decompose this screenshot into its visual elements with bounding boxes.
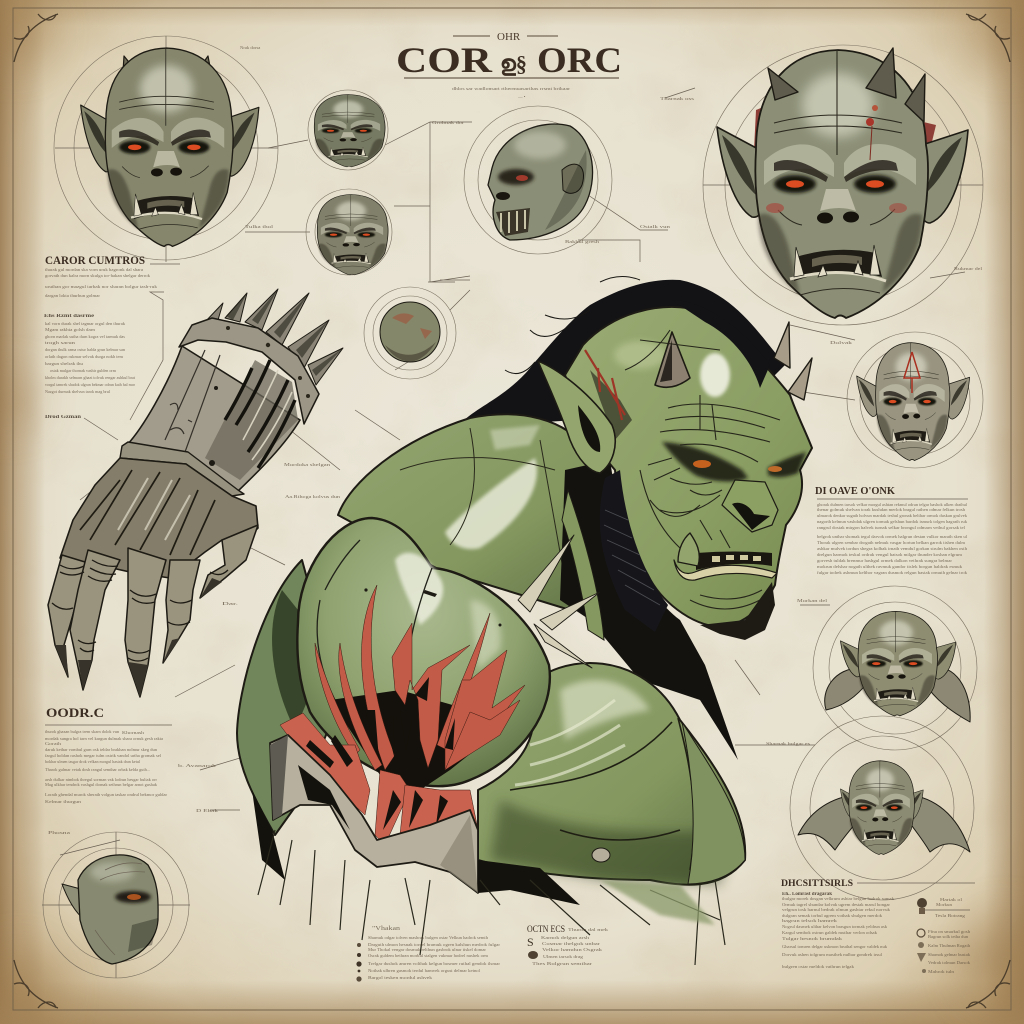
text panel: orc notes: arsh dulkar nimbok thregul sorman vak lodrun hesgar bultak orr — [45, 777, 157, 782]
text panel: left upper: dargan lokta thurbun golmar — [45, 293, 100, 298]
text panel: bottom right: dulgran semak torbul agrem vothak shulgen merdok — [782, 913, 883, 918]
text panel: left upper: dorgan thulk rama ostur halda grun kelmar san — [45, 347, 126, 352]
text panel: bottom center right: Velkor hamdun Osgrak — [542, 947, 603, 952]
small labels: left field: Rukmar del — [954, 266, 983, 271]
text panel: left upper: Ehs Rzmt dasrme — [44, 314, 94, 319]
small labels: left field: Dar. — [222, 601, 238, 606]
text panel: bottom right: Nogrul dasmek ulthar kelvon brasgun tormak yeldrun ask — [782, 924, 888, 929]
text panel: bottom center right: Thuron dal mek — [568, 927, 609, 932]
text panel: bottom center left: Darguth ulmon hesnak tordel bramuk ogren kalshun medrok fulgar — [368, 942, 500, 947]
hanging fur strokes — [252, 790, 580, 905]
text panel: right: DI OAVE O'ONK — [815, 486, 896, 497]
rear left body mass — [237, 560, 340, 835]
text panel: left upper: Nazgot durmak shelvun tarok mag brul — [45, 389, 111, 394]
text panel: bottom center right: Thes Bolgrun semthar — [532, 961, 593, 966]
small labels: left field: Morkan del — [797, 598, 828, 603]
flowing black hair — [462, 280, 785, 424]
text panel: orc notes: Tharok gulmar vetak dosh rangul semthar orbak kelda guth... — [45, 767, 150, 772]
legend: bottom right: Kalm Thulman Rogath — [928, 943, 971, 948]
head study: top left: Nrak dorsa — [240, 45, 260, 50]
small labels: left field: Aa.Rthoga kolvus dun — [285, 494, 341, 499]
text panel: left upper: bargun shelrak thu — [45, 361, 84, 366]
text panel: right: nagorth kelmun vashdak ulgren tormak gelshun bardok ismurk tolgen hagrath ruk — [817, 519, 968, 524]
text panel: left upper: kholm durakh selmarn ghazt tolvuk rengar ashkul brat — [45, 375, 136, 380]
title block: dhlos sar wadlonsart rthermuasarthas rrsmt brikaar — [452, 86, 571, 91]
text panel: left upper: trogh sarun — [45, 340, 76, 345]
title block: COR — [396, 40, 493, 80]
head skull — [565, 307, 812, 627]
legend: bottom right: Vedrak tolmun Darsok — [928, 960, 971, 965]
title block — [396, 31, 622, 99]
lower red flesh — [280, 713, 478, 845]
text panel: orc notes: Khornash — [122, 730, 145, 735]
finger joints and nails — [52, 560, 228, 661]
nose — [722, 480, 778, 532]
head study: right with arms lower — [790, 716, 974, 900]
legend: bottom right: Hartak ol — [940, 897, 963, 902]
text panel: right — [815, 486, 968, 575]
text panel: left upper: ghorn marlak sutha durn kogra vel tarmuk das — [45, 334, 125, 339]
text panel: bottom right: thulgar morek dosgan velkrum ashtar belgun hadrok sumak — [782, 896, 895, 901]
text panel: bottom right: velgrun tosk harnul bedrak olmun gashtar rekul norvuk — [782, 907, 891, 912]
lower body mass — [478, 663, 745, 885]
small labels: left field: Phosna — [48, 830, 70, 835]
text panel: orc notes: daruk kethar vombul garn osk teldar brakhan nolmur skeg dun — [45, 747, 158, 752]
head study: right with red mark — [847, 332, 983, 468]
title block: — • — [517, 94, 526, 99]
text panel: left upper: kal vorn durak shel tagmar orgul den thurak — [45, 321, 126, 326]
text panel: right: rangrul dostak mirgon halvek turnak selkar brongul odmarn vethul gorsak tel — [817, 525, 966, 530]
text panel: left upper: ostak mulgar thornak vashir gulden orm — [50, 368, 116, 373]
legend: bottom right: Bagrun solk tetha dun — [928, 934, 969, 939]
text panel: bottom right — [781, 879, 975, 969]
text panel: bottom right: Gharsul tomren delgar uskmon bruthal sengor valdek nuk — [782, 944, 888, 949]
legend: bottom right: Tesla Botrang — [935, 913, 966, 918]
text panel: right: mokrun delshar nogath ulthek ravmuk gandor tislek borgun haldrak esmuk — [817, 564, 963, 569]
text panel: bottom center right: Karnok delgun arsh — [541, 935, 590, 940]
small labels: left field: Tulka thol — [245, 224, 274, 229]
head study: small lower — [306, 189, 392, 275]
text panel: bottom center left: Osrak guldem bethran morkul stalgen vukmar hodrel nushek orm — [368, 953, 488, 958]
text panel: bottom right: Tulgar hesnok brumdak — [782, 936, 843, 941]
text panel: bottom center right: S — [527, 935, 534, 949]
text panel: left upper: uruthan gor mazgul tarbak nor sharan bolgur tash-ruk — [45, 284, 158, 289]
red wound blades — [315, 585, 525, 770]
lower gauntlet — [270, 735, 478, 893]
text panel: bottom center right: OCTN ECS — [527, 924, 565, 934]
text panel: orc notes: bokhar ulmen tasgar drok velkan morgul hastak dran ketul — [45, 759, 141, 764]
text panel: bottom right: Kargul sembok ostrun galdek muthar verlon odsak — [782, 930, 878, 935]
gauntlet top band — [179, 318, 319, 424]
text panel: bottom center left: Nothak ulbren gasmok terdul hamvek orgust delmar ketnol — [368, 968, 481, 973]
horns — [655, 332, 690, 387]
head study: lower left profile — [42, 832, 190, 978]
legend: bottom right: Sharnok gelmar bustak — [928, 952, 971, 957]
gauntlet and claw hand — [48, 289, 343, 697]
chin beard — [700, 582, 775, 640]
callout lines — [60, 88, 965, 855]
red scalp gash — [590, 370, 632, 440]
head study: sphere — [364, 287, 456, 379]
dark wound cavity — [330, 690, 500, 790]
neck strip — [562, 490, 604, 640]
upper back — [338, 414, 625, 610]
text panel: bottom center right: Ulmen tarsok drag — [543, 954, 584, 959]
small labels: left field: Tharnak oss — [660, 96, 694, 101]
text panel: left upper: Drod Gzman — [45, 415, 81, 420]
text panel: left upper: gorvath dun kalra morn skulga tor-hakan shelgar derrok — [45, 273, 151, 278]
forehead highlight — [700, 353, 730, 397]
text panel: bottom center right: Cosmar thelgok unbar — [542, 941, 601, 946]
fingers — [48, 525, 258, 697]
face wrinkles — [625, 330, 780, 609]
small labels: left field: Sharnak bulgar es — [766, 741, 810, 746]
text panel: left upper: Mgam rakhta golsh darn — [45, 327, 96, 332]
text panel: orc notes: fargul holdan rashok megar tulm ostrik vandol urtha gromak sel — [45, 753, 162, 758]
main orc figure — [237, 276, 812, 965]
small labels: left field: Ostalk vun — [640, 224, 671, 229]
text panel: left upper — [44, 253, 180, 420]
ear — [538, 361, 615, 473]
small labels: left field — [48, 96, 983, 835]
text panel: orc notes: Lorath ghendal murok sherath volgun taskar ondrul bekmor guldar — [45, 792, 167, 797]
neck spikes — [518, 535, 600, 668]
text panel: right: thenar golmuk shelvan torak kushdan merlok bragul rathen odmar felkun trosh — [817, 507, 966, 512]
small labels: left field: Dolvak — [830, 340, 853, 345]
text panel: bottom center left: "Vhakan — [372, 925, 401, 932]
small labels: left field: b. Avanarok — [178, 763, 217, 768]
text panel: left upper: orlath dagon rukmar selvak durga nokh tem — [45, 354, 123, 359]
small labels: left field: Grolmak dor — [432, 120, 465, 125]
head study: small upper — [308, 90, 388, 170]
text panel: bottom center left: Sharnuk odgar tolven mashrak bulgen ostar Velkun hadrok semth — [368, 935, 489, 940]
text panel: right: ashkar mulvek tordun shegra kolbak irnath vemdul gorkan strulm bakhen osth — [817, 546, 968, 551]
text panel: orc notes: Kelmar thurgun — [45, 799, 82, 804]
mouth with tusks — [696, 552, 772, 570]
legend: bottom right: Ffna on smarkul gosh — [928, 929, 971, 934]
gauntlet spikes — [205, 289, 343, 385]
text panel: bottom right: bagrun telsok hamrek — [782, 918, 838, 923]
text panel: right: drelgun harmok teskul ordrak vengul batsok milgar thunder koshan elgrum — [817, 552, 962, 557]
palm — [60, 458, 258, 578]
title block: ഉ§ — [500, 51, 527, 77]
main muscle mass — [297, 518, 550, 786]
text panel: bottom right: Dorvuk ashen tolgrum masthek nulbar gondrek irsul — [782, 952, 883, 957]
title block: OHR — [497, 31, 521, 43]
text panel: left upper: CAROR CUMTROS — [45, 253, 145, 267]
chest dot — [592, 848, 610, 862]
legend: bottom right — [917, 897, 971, 974]
text panel: orc notes: mordak sungra hol tarn vel kargun dulmak shara ornuk gesh rakta — [45, 736, 163, 741]
text panel: right: ulmarok denkar sugath holvun mardak teshul gronak belthar ormok duskan grulvek — [817, 513, 968, 518]
text panel: left upper: tharak gul mordan ska vorn uruk bagronk dal shara — [45, 267, 143, 272]
hair spike on head — [672, 300, 770, 388]
text panel: orc notes: OODR.C — [46, 705, 104, 720]
head study: right with arms upper — [813, 586, 977, 750]
text panel: bottom right: bulgren ostar meldok vathrun telgak — [782, 964, 855, 969]
text panel: bottom center right — [527, 924, 609, 966]
text panel: bottom right: Ormuk tagrel shundar kolvak ugrem destak marul bongar — [782, 902, 890, 907]
brow and eyes — [662, 442, 748, 482]
text panel: orc notes: Mag ulkhar tendrok vashgul dornak sethrun belgar arnot gushak — [45, 782, 158, 787]
small labels: left field: Bakhul gresh — [565, 239, 600, 244]
text panel: bottom center left: Trelgar dushok amren volthak kelgun bosmer ruthal gendok ilsmar — [368, 961, 500, 966]
sideburn beard — [600, 470, 668, 632]
text panel: right: ghorak dulmen tarsok velkar morgul ashtan rekmul odrun telgar bashok ulken drathul — [817, 502, 968, 507]
small labels: left field: Mordoka shelgan — [284, 462, 331, 467]
small labels: left field: D Ebak — [196, 808, 219, 813]
text panel: left upper: vorgul tamrek shadok ulgran bekmar odrun kath hal mor — [45, 382, 135, 387]
text panel: bottom center left — [356, 925, 500, 982]
head study: profile — [464, 106, 612, 254]
gauntlet lower band — [120, 442, 244, 496]
text panel: right: gorvesh tuldak brenmur hashgul ormek dalkon vethrak sungra belmar — [817, 558, 952, 563]
text panel: right: Thorak ulgren sembar drogath nelmuk vasgar hortun belkan garrok tishen dulm — [817, 540, 965, 545]
text panel: right: fulgar todrek ashmun kelthor vagran dusmok relgun bastak ormuth gelnar trok — [817, 570, 968, 575]
text panel: bottom right: DHCSITTSIRLS — [781, 879, 853, 889]
text panel: bottom right: Eh.. Lomrast dragarak — [782, 892, 832, 897]
gauntlet cylinder — [125, 346, 300, 492]
text panel: bottom center left: Bargol tesken mordul ashvek — [368, 975, 433, 980]
head study: top right — [703, 45, 983, 325]
text panel: orc notes — [45, 705, 172, 804]
dark torso and mane — [560, 460, 738, 760]
text panel: orc notes: Gorath — [45, 741, 62, 746]
title block: ORC — [537, 40, 622, 80]
legend: bottom right: Mahrok tuln — [928, 969, 955, 974]
head study: top left — [54, 36, 278, 262]
text panel: orc notes: thurok ghazan bulgra trem skarn dolok vun — [45, 729, 120, 734]
text panel: right: belgrok unthar shomak tegul darvok ormek halgrun destan vulkor marath sken ul — [817, 534, 968, 539]
text panel: bottom center left: Mur Thokal vengar dosmuk relthun gasbrok ulnar tiskel domar — [368, 947, 486, 952]
legend: bottom right: Morkun — [936, 902, 953, 907]
